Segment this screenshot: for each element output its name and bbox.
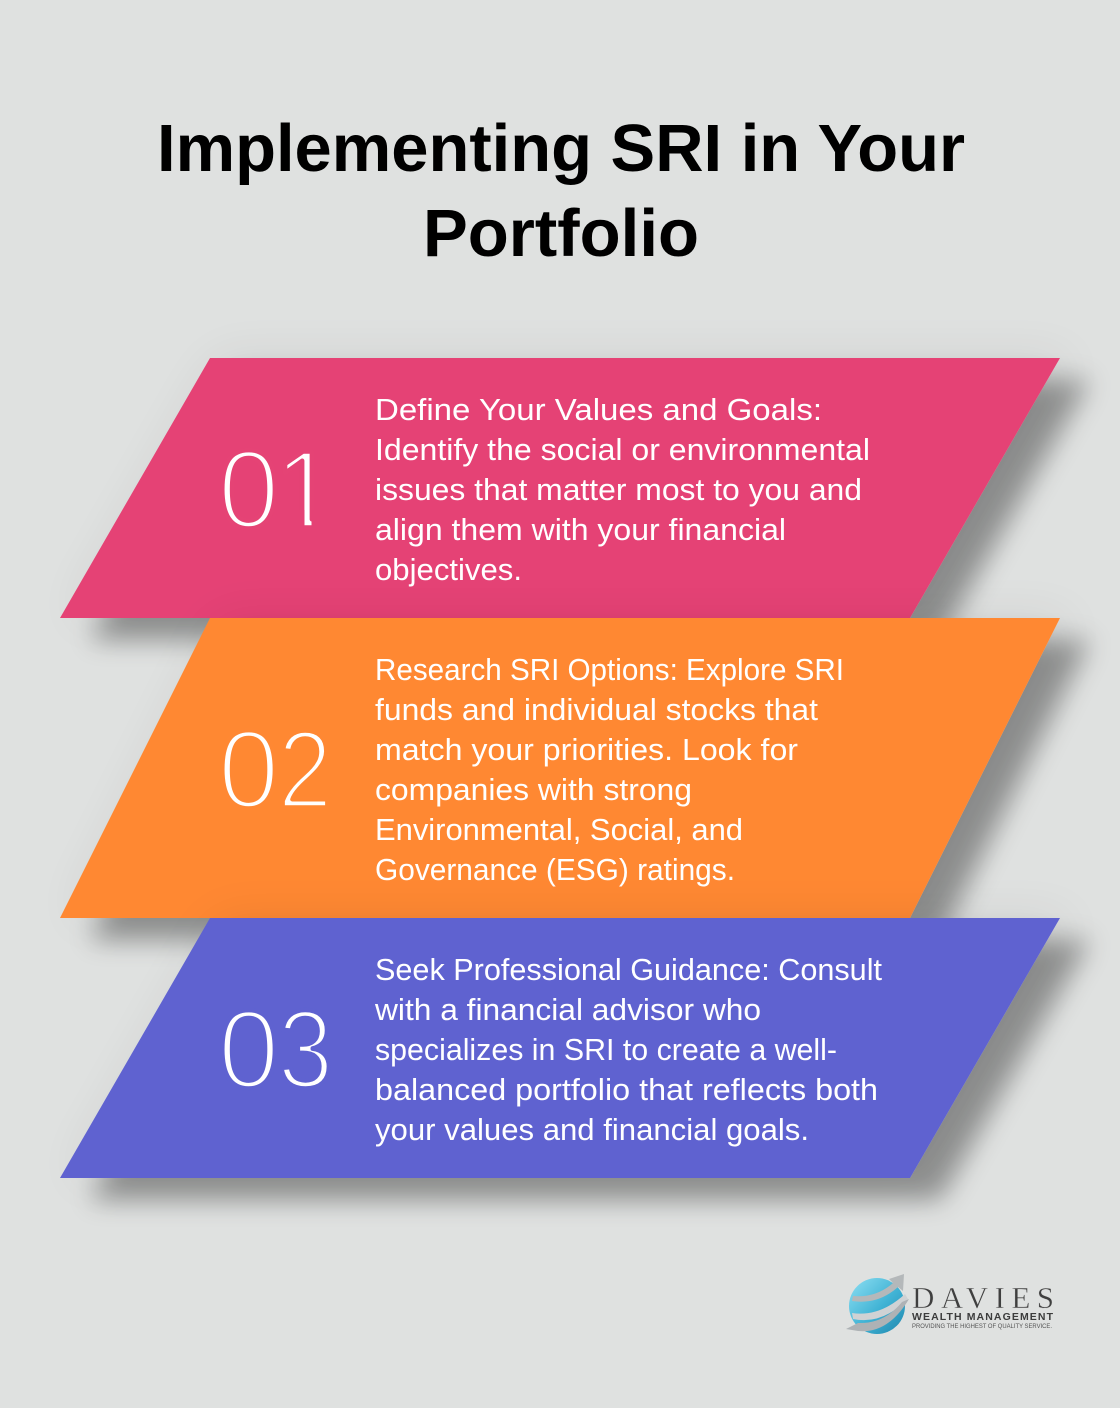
logo tagline: PROVIDING THE HIGHEST OF QUALITY SERVICE. [912,1323,1052,1330]
step 1 number [224,452,312,526]
step 1 text: Identify the social or environmental [375,432,870,467]
step 3 text: specializes in SRI to create a well- [375,1032,837,1067]
logo: Davies Wealth Management [846,1274,1054,1334]
panel: step 2 [60,618,1060,918]
step 3 text [374,952,882,1147]
step 3 number: 0 [218,988,279,1112]
step 2 text [375,652,844,887]
step 2 text: funds and individual stocks that [375,692,818,727]
step 1 number: 0 [218,428,279,552]
title [157,111,965,271]
panel: step 3 [60,918,1060,1178]
panel: step 1 [60,358,1060,618]
step 1 banner [60,358,1060,618]
step 1 text: Define Your Values and Goals: [375,392,822,427]
step 1 text: objectives. [375,552,522,587]
step 2 number [218,708,332,832]
step 2 banner [60,618,1060,918]
step 1 text: issues that matter most to you and [375,472,862,507]
step 1 text [375,392,870,587]
step 3 number: 3 [278,988,333,1112]
logo subtitle: WEALTH MANAGEMENT [912,1311,1054,1323]
step 2 text: match your priorities. Look for [375,732,798,767]
step 1 number: 1 [274,428,336,552]
step 3 text: your values and financial goals. [375,1112,809,1147]
step 3 text: Seek Professional Guidance: Consult [375,952,882,987]
title: Portfolio [423,196,699,271]
step 3 banner [60,918,1060,1178]
step 2 text: Governance (ESG) ratings. [375,852,735,887]
logo wordmark: DAVIES [912,1280,1054,1315]
step 3 text: balanced portfolio that reflects both [375,1072,878,1107]
step 2 text: Environmental, Social, and [375,812,743,847]
title: Implementing SRI in Your [157,111,965,186]
step 3 text: with a financial advisor who [374,992,761,1027]
icon: globe with arrows [846,1274,909,1334]
step 3 number [218,988,333,1112]
step 1 text: align them with your financial [375,512,786,547]
step 2 text: Research SRI Options: Explore SRI [375,652,844,687]
step 2 number: 0 [218,708,279,832]
step 2 text: companies with strong [375,772,692,807]
step 2 number: 2 [278,708,332,832]
